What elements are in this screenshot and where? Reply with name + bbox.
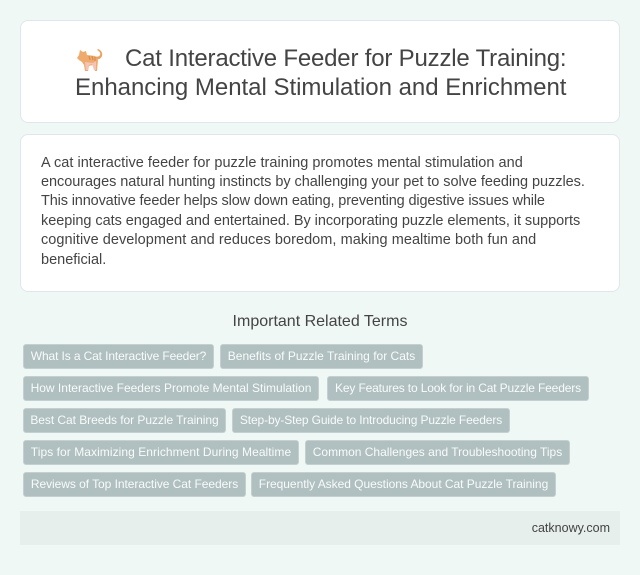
text block: description: encourages natural hunting instincts by challenging your pet to solve feeding puzzles. (41, 174, 585, 190)
tag: How Interactive Feeders Promote Mental Stimulation (31, 381, 311, 395)
text block: description (41, 155, 585, 268)
tag list (23, 344, 589, 497)
tag (23, 344, 214, 369)
tag: Step-by-Step Guide to Introducing Puzzle Feeders (240, 413, 502, 427)
panel: description card (20, 134, 620, 292)
heading: important related terms: Important Related Terms (233, 313, 407, 330)
tag: Tips for Maximizing Enrichment During Mealtime (31, 445, 291, 459)
footer text: catknowy.com (532, 521, 610, 535)
heading: title (75, 45, 566, 101)
heading: title: Cat Interactive Feeder for Puzzle Training: (125, 45, 566, 72)
tag (251, 472, 556, 497)
tag: Key Features to Look for in Cat Puzzle Feeders (335, 381, 581, 395)
text block: description: beneficial. (41, 252, 106, 268)
tag: Best Cat Breeds for Puzzle Training (30, 413, 219, 427)
text block: description: keeping cats engaged and entertained. By incorporating puzzle elements, it supports (41, 213, 580, 229)
tag (23, 440, 299, 465)
text block: description: cognitive development and reduces boredom, making mealtime both fun and (41, 232, 536, 248)
tag (23, 408, 226, 433)
tag (327, 376, 589, 401)
tag (23, 472, 246, 497)
icon: cat (77, 49, 102, 71)
panel: title card (20, 20, 620, 123)
tag (220, 344, 423, 369)
tag: Frequently Asked Questions About Cat Puzzle Training (259, 477, 548, 491)
tag (232, 408, 510, 433)
text block: description: This innovative feeder helps slow down eating, preventing digestive issues while (41, 193, 545, 209)
tag: Benefits of Puzzle Training for Cats (228, 349, 415, 363)
tag (23, 376, 319, 401)
tag: What Is a Cat Interactive Feeder? (31, 349, 206, 363)
tag (305, 440, 570, 465)
tag: Common Challenges and Troubleshooting Tips (313, 445, 562, 459)
tag: Reviews of Top Interactive Cat Feeders (31, 477, 238, 491)
footer bar (20, 511, 620, 545)
heading: title: Enhancing Mental Stimulation and Enrichment (75, 74, 566, 101)
text block: description: A cat interactive feeder for puzzle training promotes mental stimulation and (41, 155, 523, 171)
